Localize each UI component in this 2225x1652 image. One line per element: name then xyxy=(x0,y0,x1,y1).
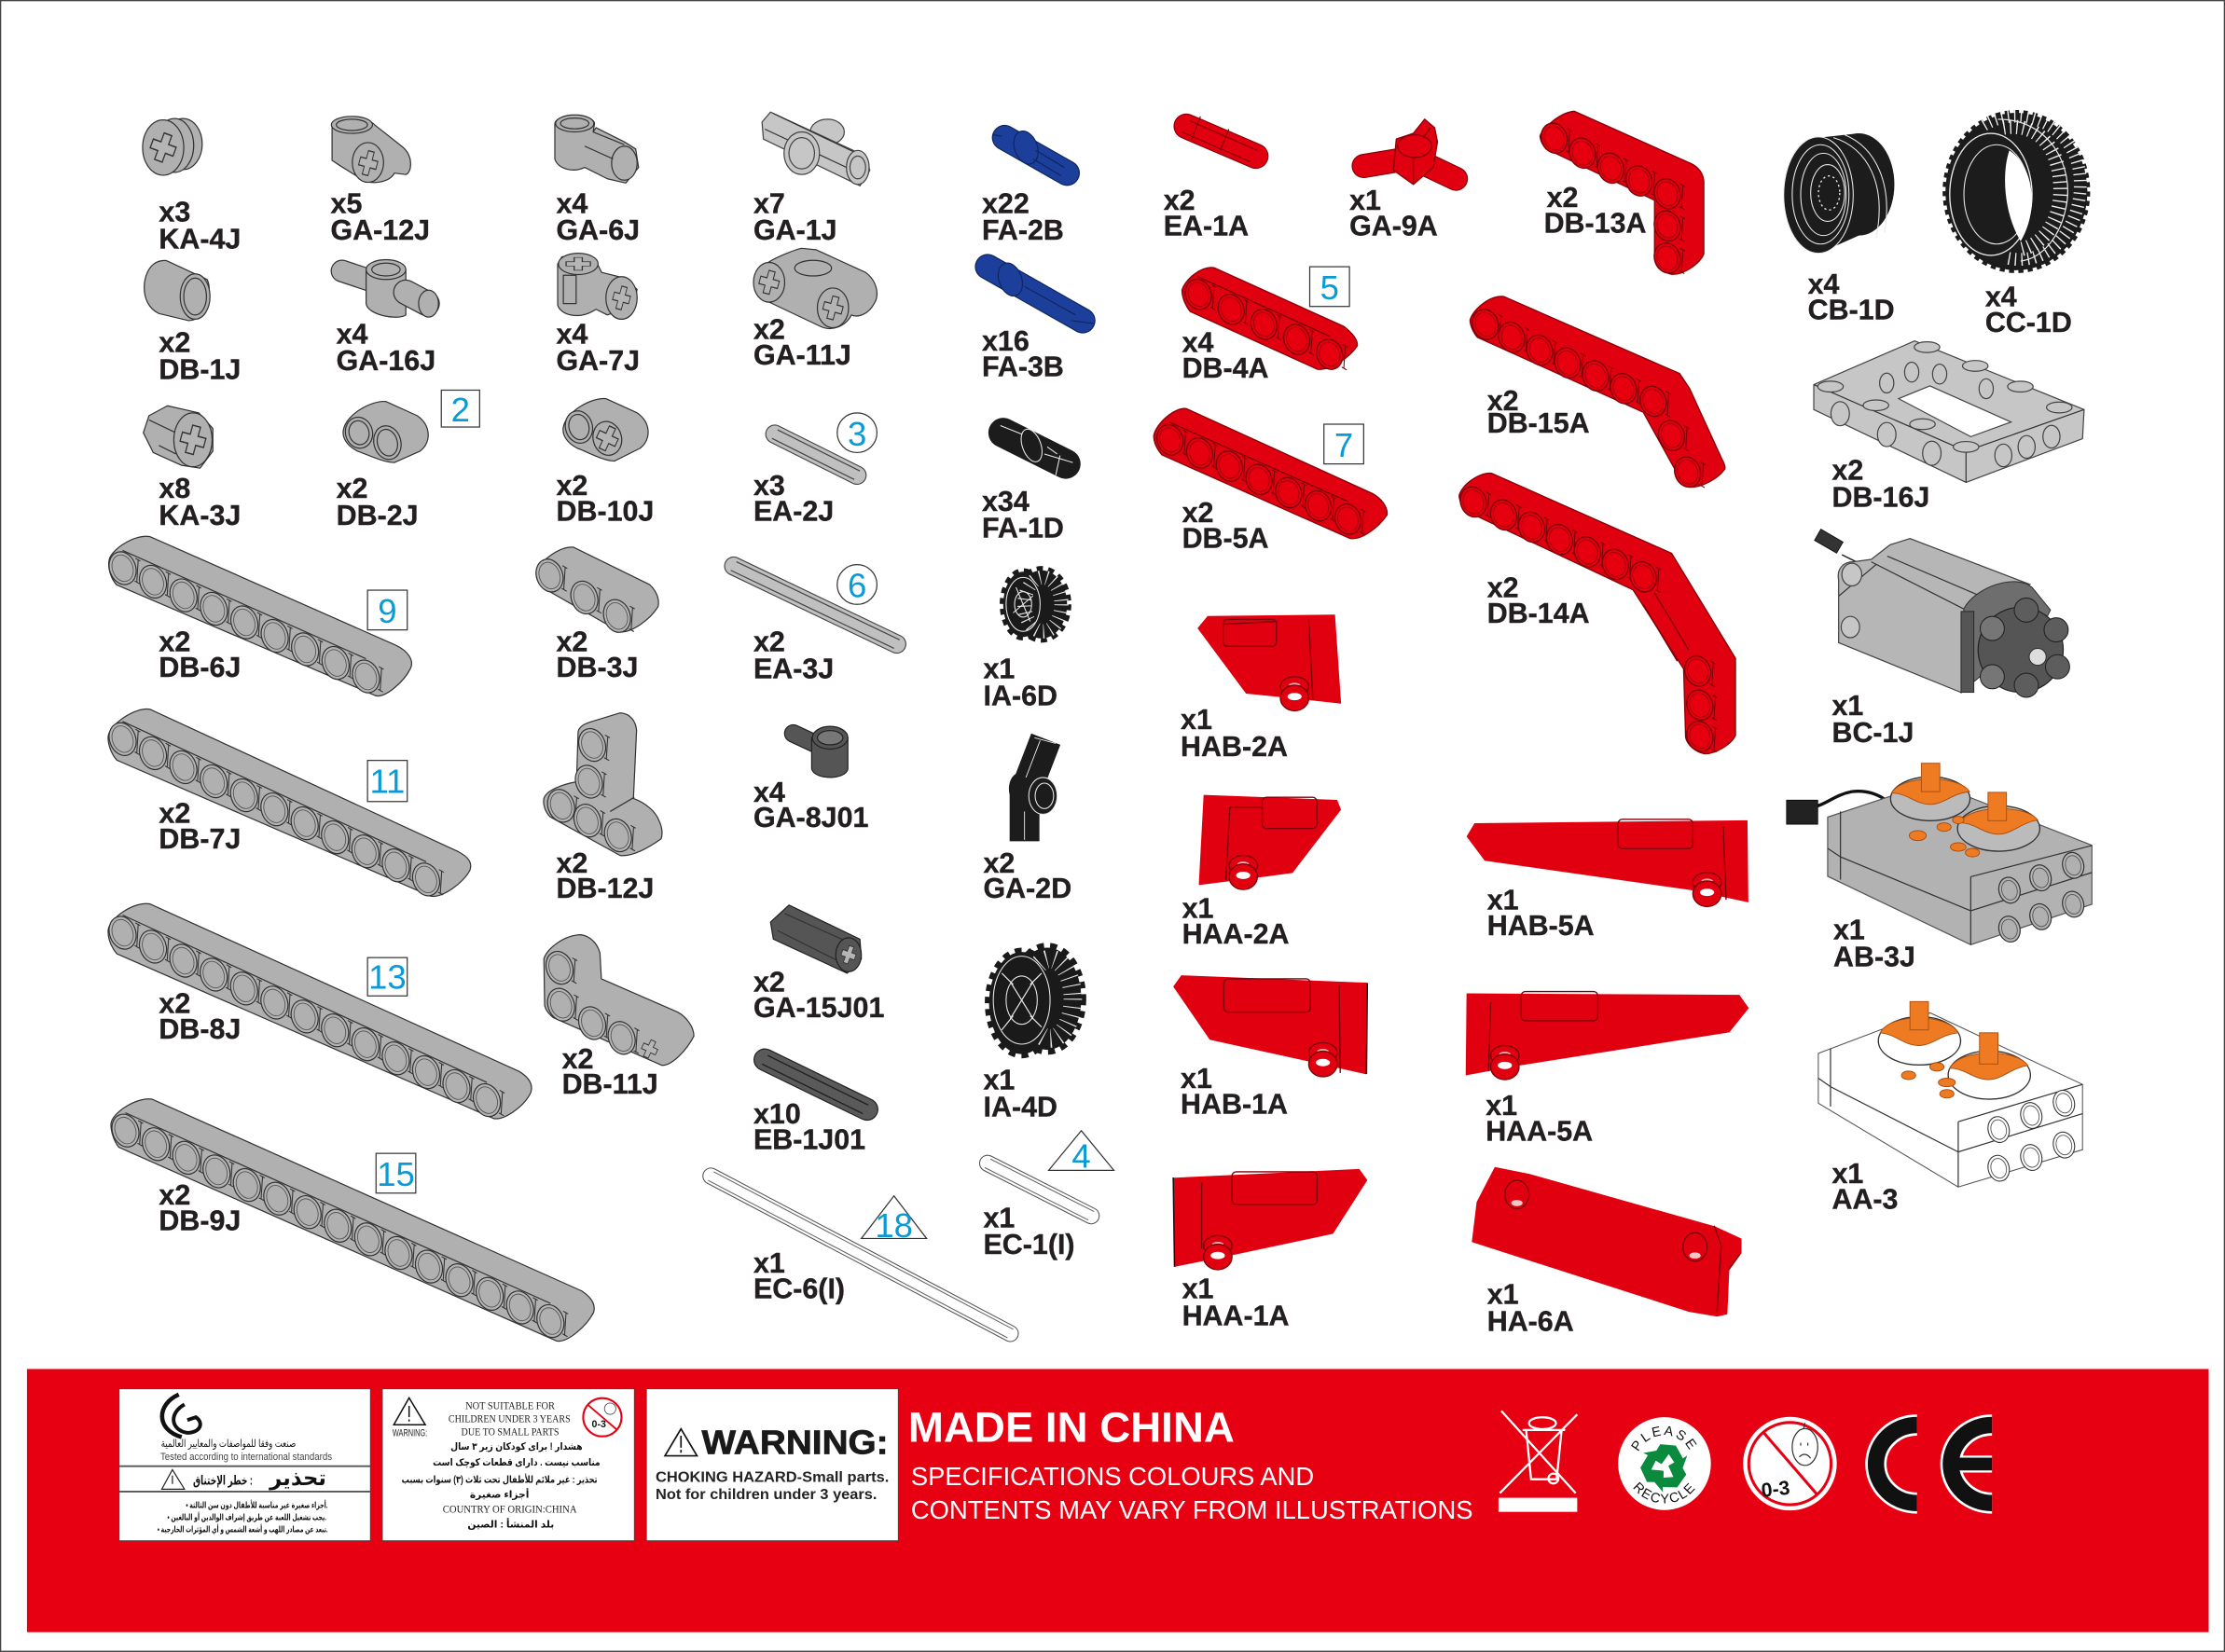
icon: GA-11J connector xyxy=(753,248,877,328)
icon: DB-15A red bent beam xyxy=(1468,296,1725,490)
icon: EC-1(I) axle xyxy=(985,1159,1094,1220)
label: CB-1D: CB-1D xyxy=(1808,294,1895,325)
icon: DB-5A red beam xyxy=(1153,408,1387,539)
badge: 2 xyxy=(441,390,479,429)
icon: GA-2D black connector xyxy=(1009,737,1057,841)
text: english warning: CHILDREN UNDER 3 YEARS xyxy=(449,1413,571,1425)
icon: FA-3B blue pin xyxy=(988,259,1094,324)
label: FA-2B: x22 xyxy=(982,187,1030,219)
part: FA-2B xyxy=(982,128,1067,246)
panel: certification label: Tested according to international standards xyxy=(160,1452,332,1463)
label: GA-16J: GA-16J xyxy=(337,345,435,377)
label: IA-6D: x1 xyxy=(984,653,1015,684)
panel: certification label xyxy=(119,1389,370,1541)
icon: please recycle: PLEASE xyxy=(1631,1426,1697,1451)
icon: CC-1D tyre xyxy=(1945,113,2087,270)
icon: CE mark xyxy=(1876,1425,1992,1503)
icon: please recycle: RECYCLE xyxy=(1633,1482,1695,1503)
part: HAB-2A xyxy=(1181,614,1341,763)
icon: HAB-1A red panel xyxy=(1173,975,1367,1077)
label: DB-11J: DB-11J xyxy=(562,1068,658,1100)
icon: DB-9J beam xyxy=(107,1099,594,1342)
icon: EB-1J01 axle xyxy=(762,1055,868,1114)
part: GA-2D xyxy=(984,737,1071,904)
text: english warning xyxy=(443,1400,577,1516)
icon: warning triangle small xyxy=(394,1397,425,1425)
badge: 15: 15 xyxy=(377,1155,415,1193)
label: HAB-1A: HAB-1A xyxy=(1181,1089,1288,1121)
panel: certification label: • أجزاء صغيرة غير مناسبة للأطفال دون سن الثالثة. xyxy=(186,1500,328,1511)
icon: DB-1J cylinder xyxy=(145,260,210,321)
part: DB-12J xyxy=(543,713,662,904)
icon: AB-3J battery box xyxy=(1787,764,2092,944)
icon: not for 0-3: 0-3 xyxy=(1760,1477,1791,1502)
icon: logo xyxy=(162,1395,200,1437)
text: specifications: SPECIFICATIONS COLOURS AND xyxy=(911,1462,1314,1491)
text: choking hazard: CHOKING HAZARD-Small parts. xyxy=(656,1469,889,1485)
label: DB-3J: DB-3J xyxy=(556,652,638,683)
icon: IA-4D gear xyxy=(989,948,1082,1054)
label: GA-9A: x1 xyxy=(1349,185,1381,216)
icon: EA-2J axle xyxy=(772,430,860,479)
label: EA-2J: EA-2J xyxy=(753,495,834,527)
part: IA-4D xyxy=(984,948,1082,1123)
label: DB-13A: DB-13A xyxy=(1544,208,1647,240)
label: DB-8J: x2 xyxy=(159,988,190,1020)
text: english warning: COUNTRY OF ORIGIN:CHINA xyxy=(443,1504,577,1516)
label: EA-3J: x2 xyxy=(753,626,785,657)
icon: DB-10J beam xyxy=(561,399,648,461)
badge: 3: 3 xyxy=(848,415,866,453)
badge: 5 xyxy=(1310,267,1349,307)
part: GA-11J xyxy=(753,248,877,371)
label: DB-9J: DB-9J xyxy=(159,1205,241,1236)
label: BC-1J: BC-1J xyxy=(1831,717,1914,749)
icon: HAA-5A red panel xyxy=(1466,992,1748,1080)
label: DB-10J: x2 xyxy=(556,470,587,502)
badge: 6: 6 xyxy=(848,567,866,605)
icon: DB-2J beam xyxy=(342,402,428,462)
label: IA-4D: x1 xyxy=(984,1065,1015,1096)
label: DB-10J: DB-10J xyxy=(556,495,654,527)
label: HAB-5A: x1 xyxy=(1487,884,1519,915)
label: DB-2J: x2 xyxy=(337,473,367,504)
part: DB-10J xyxy=(556,399,654,527)
label: DB-6J: x2 xyxy=(159,626,190,657)
icon: 0-3 small xyxy=(583,1398,621,1437)
icon: DB-6J beam xyxy=(104,536,411,696)
part: DB-6J xyxy=(104,536,411,696)
text: persian and arabic warning: هشدار ! برای کودکان زیر ۳ سال xyxy=(450,1441,583,1452)
badge: 3 xyxy=(837,413,877,453)
label: HAB-1A: x1 xyxy=(1181,1063,1212,1094)
label: IA-6D: IA-6D xyxy=(984,680,1057,711)
label: DB-12J: DB-12J xyxy=(556,873,654,904)
part: DB-9J xyxy=(107,1099,594,1342)
part: DB-3J xyxy=(532,547,658,683)
text: english warning: NOT SUITABLE FOR xyxy=(465,1400,555,1412)
icon: GA-7J connector xyxy=(558,254,637,319)
label: DB-1J: DB-1J xyxy=(159,353,241,385)
icon: GA-16J connector pin xyxy=(342,259,438,317)
part: HAB-5A xyxy=(1467,819,1748,942)
label: AB-3J: AB-3J xyxy=(1833,941,1915,972)
label: GA-1J: x7 xyxy=(753,187,785,219)
icon: DB-14A red bent beam xyxy=(1456,474,1735,755)
label: DB-14A: DB-14A xyxy=(1487,598,1590,629)
text: choking hazard: Not for children under 3 years. xyxy=(656,1487,877,1503)
icon: GA-8J01 connector xyxy=(794,726,848,778)
label: DB-11J: x2 xyxy=(562,1043,593,1075)
label: HAB-2A: x1 xyxy=(1181,704,1212,736)
part: CB-1D xyxy=(1784,133,1895,325)
badge: 7: 7 xyxy=(1334,426,1353,464)
label: GA-2D: x2 xyxy=(984,847,1015,879)
part: KA-4J xyxy=(143,118,241,255)
icon: DB-7J beam xyxy=(104,709,471,900)
panel: choking hazard warning xyxy=(646,1389,898,1541)
label: HAA-5A: x1 xyxy=(1486,1090,1517,1122)
text: persian and arabic warning: مناسب نیست . دارای قطعات کوچک است xyxy=(433,1457,601,1468)
icon: FA-2B blue pin xyxy=(993,128,1067,176)
label: DB-15A: x2 xyxy=(1487,385,1519,417)
part: CC-1D xyxy=(1945,113,2087,338)
label: DB-14A: x2 xyxy=(1487,572,1519,604)
label: DB-16J: DB-16J xyxy=(1831,481,1929,513)
label: FA-3B: FA-3B xyxy=(982,351,1064,382)
part: GA-1J xyxy=(753,112,870,246)
label: GA-7J: GA-7J xyxy=(556,345,640,377)
label: DB-2J: DB-2J xyxy=(337,500,419,531)
part: HAA-5A xyxy=(1466,992,1748,1147)
label: DB-12J: x2 xyxy=(556,847,587,879)
icon: CB-1D wheel rim xyxy=(1784,133,1894,254)
label: DB-16J: x2 xyxy=(1831,454,1863,486)
icon: warning triangle xyxy=(665,1429,697,1456)
label: FA-1D: FA-1D xyxy=(982,513,1064,544)
badge: 18 xyxy=(862,1196,927,1245)
icon: GA-9A red connector xyxy=(1363,119,1456,185)
panel: certification label: • تبعد عن مصادر اللهب و أشعة الشمس و أي المؤثرات الخارجية. xyxy=(158,1523,328,1535)
part: GA-9A xyxy=(1349,119,1456,242)
heading: made in china: MADE IN CHINA xyxy=(908,1404,1235,1452)
badge: 9: 9 xyxy=(378,592,397,630)
part: EB-1J01 xyxy=(753,1055,868,1156)
text: arabic warning: تحذير xyxy=(269,1466,326,1491)
panel: certification label: • يجب تشغيل اللعبة عن طريق إشراف الوالدين أو البالغين. xyxy=(168,1512,326,1523)
badge: 5: 5 xyxy=(1320,268,1339,307)
label: DB-9J: x2 xyxy=(159,1179,190,1211)
part: EC-1(I) xyxy=(984,1159,1094,1260)
label: AA-3: AA-3 xyxy=(1831,1183,1898,1215)
part: DB-7J xyxy=(104,709,471,900)
label: DB-8J: DB-8J xyxy=(159,1013,241,1045)
icon: HA-6A red panel xyxy=(1472,1167,1742,1316)
icon: EA-1A red axle xyxy=(1182,117,1257,161)
part: BC-1J xyxy=(1815,530,2069,749)
icon: KA-4J bush xyxy=(143,118,202,175)
badge: 13: 13 xyxy=(368,958,407,997)
label: HA-6A: x1 xyxy=(1487,1278,1519,1310)
icon: HAB-5A red panel xyxy=(1467,819,1748,906)
label: HAA-2A: x1 xyxy=(1182,893,1213,925)
label: EA-1A: x2 xyxy=(1164,185,1195,216)
part: EA-3J xyxy=(731,562,900,684)
part: FA-1D xyxy=(982,426,1072,544)
part: DB-2J xyxy=(337,402,428,531)
text: persian and arabic warning: تحذير : غير ملائم للأطفال تحت ثلاث (٣) سنوات بسبب xyxy=(402,1474,598,1486)
panel: multilingual age warning label xyxy=(382,1389,634,1541)
part: HAA-1A xyxy=(1173,1169,1367,1331)
label: DB-7J: x2 xyxy=(159,798,190,830)
icon: BC-1J motor xyxy=(1815,530,2069,697)
icon: HAA-1A red panel xyxy=(1173,1169,1367,1270)
text: specifications: CONTENTS MAY VARY FROM ILLUSTRATIONS xyxy=(911,1495,1473,1524)
badge: 7 xyxy=(1324,424,1363,464)
text: persian and arabic warning xyxy=(402,1441,601,1530)
icon: GA-15J01 hex tube xyxy=(770,905,862,973)
label: DB-5A: x2 xyxy=(1182,497,1213,529)
label: EA-2J: x3 xyxy=(753,470,785,502)
part: DB-4A xyxy=(1182,268,1358,384)
part: GA-15J01 xyxy=(753,905,884,1024)
label: GA-15J01: x2 xyxy=(753,967,785,998)
label: EC-1(I): x1 xyxy=(984,1202,1015,1233)
text: english warning: DUE TO SMALL PARTS xyxy=(462,1425,560,1438)
part: GA-8J01 xyxy=(753,726,869,833)
label: EC-6(I): x1 xyxy=(753,1247,785,1279)
part: DB-11J xyxy=(542,935,694,1100)
part: GA-7J xyxy=(556,254,640,377)
badge: 18: 18 xyxy=(875,1206,913,1245)
icon: crossed-out bin xyxy=(1499,1411,1577,1512)
panel: red footer banner xyxy=(26,1369,2208,1632)
label: BC-1J: x1 xyxy=(1831,690,1863,722)
label: DB-4A: x4 xyxy=(1182,326,1213,358)
part: AA-3 xyxy=(1818,1001,2082,1215)
label: GA-12J: x5 xyxy=(331,187,362,219)
icon: DB-4A red beam xyxy=(1182,268,1358,373)
icon: not for 0-3 xyxy=(1743,1417,1837,1510)
label: HA-6A: HA-6A xyxy=(1487,1305,1574,1337)
part: DB-8J xyxy=(104,903,532,1121)
icon: GA-1J connector xyxy=(762,112,870,186)
icon: DB-13A red L-beam xyxy=(1537,111,1704,277)
label: DB-3J: x2 xyxy=(556,626,587,657)
label: CC-1D: CC-1D xyxy=(1985,307,2072,338)
label: HAA-1A: HAA-1A xyxy=(1182,1300,1290,1331)
label: EB-1J01: x10 xyxy=(753,1098,801,1130)
part: HAB-1A xyxy=(1173,975,1367,1121)
icon: DB-11J L-beam xyxy=(542,935,694,1066)
label: EC-1(I): EC-1(I) xyxy=(984,1229,1075,1260)
part: AB-3J xyxy=(1787,764,2092,972)
label: GA-6J: x4 xyxy=(556,187,587,219)
icon: HAA-2A red panel xyxy=(1199,795,1341,889)
part: HAA-2A xyxy=(1182,795,1341,950)
label: EA-1A: EA-1A xyxy=(1164,211,1249,242)
icon: please recycle xyxy=(1618,1417,1711,1510)
label: KA-3J: KA-3J xyxy=(159,500,241,531)
part: EA-2J xyxy=(753,430,860,527)
label: KA-4J: x3 xyxy=(159,196,190,227)
icon: IA-6D gear xyxy=(1003,571,1067,639)
part: DB-13A xyxy=(1537,111,1704,277)
label: GA-7J: x4 xyxy=(556,318,587,350)
text: persian and arabic warning: أجزاء صغيرة xyxy=(470,1488,529,1501)
label: DB-5A: DB-5A xyxy=(1182,522,1269,554)
label: GA-11J: x2 xyxy=(753,314,785,346)
part: DB-16J xyxy=(1814,341,2084,513)
label: AB-3J: x1 xyxy=(1833,914,1865,945)
badge: 2: 2 xyxy=(451,391,470,429)
part: KA-3J xyxy=(144,406,241,531)
label: GA-9A: GA-9A xyxy=(1349,211,1438,242)
part: DB-1J xyxy=(145,260,241,385)
icon: FA-1D black pin xyxy=(1001,426,1072,475)
label: GA-15J01: GA-15J01 xyxy=(753,992,884,1024)
label: DB-15A: DB-15A xyxy=(1487,407,1590,439)
icon: GA-12J connector xyxy=(331,117,410,183)
icon: GA-6J connector xyxy=(555,115,639,183)
badge: 4 xyxy=(1049,1131,1114,1175)
part: EC-6(I) xyxy=(708,1172,1013,1338)
part: EA-1A xyxy=(1164,117,1257,242)
label: FA-1D: x34 xyxy=(982,486,1030,517)
label: DB-4A: DB-4A xyxy=(1182,352,1269,384)
label: HAA-5A: HAA-5A xyxy=(1486,1115,1593,1147)
label: GA-8J01: GA-8J01 xyxy=(753,802,869,833)
panel: certification label: خطر الإختناق : xyxy=(193,1473,253,1488)
label: EA-3J: EA-3J xyxy=(753,653,834,684)
label: GA-1J: GA-1J xyxy=(753,214,837,246)
label: FA-3B: x16 xyxy=(982,325,1030,357)
label: FA-2B: FA-2B xyxy=(982,214,1064,246)
label: GA-11J: GA-11J xyxy=(753,339,851,371)
part: GA-12J xyxy=(331,117,430,246)
label: GA-6J: GA-6J xyxy=(556,214,640,246)
label: EB-1J01: EB-1J01 xyxy=(753,1124,865,1156)
text: tested: صنعت وفقا للمواصفات والمعايير العالمية xyxy=(161,1439,296,1451)
label: DB-13A: x2 xyxy=(1547,182,1578,213)
icon: 0-3 small: 0-3 xyxy=(592,1419,606,1430)
label: KA-3J: x8 xyxy=(159,473,190,504)
label: AA-3: x1 xyxy=(1831,1158,1863,1190)
part: IA-6D xyxy=(984,571,1067,711)
label: DB-7J: DB-7J xyxy=(159,823,241,855)
label: DB-1J: x2 xyxy=(159,326,190,358)
icon: HAB-2A red panel xyxy=(1197,614,1341,710)
icon: warning triangle xyxy=(161,1469,185,1489)
text: warning word: WARNING: xyxy=(393,1428,427,1439)
badge: 9 xyxy=(367,590,408,630)
badge: 11: 11 xyxy=(369,763,405,801)
label: IA-4D: IA-4D xyxy=(984,1092,1057,1123)
part: GA-6J xyxy=(555,115,640,246)
label: HAA-1A: x1 xyxy=(1182,1273,1213,1304)
icon: EC-6(I) axle xyxy=(708,1172,1013,1338)
icon: DB-3J beam xyxy=(532,547,658,636)
icon: AA-3 battery box xyxy=(1818,1001,2082,1187)
label: GA-2D: GA-2D xyxy=(984,873,1071,904)
icon: DB-12J T-beam xyxy=(543,713,662,856)
part: DB-14A xyxy=(1456,474,1735,755)
part: HA-6A xyxy=(1472,1167,1742,1337)
part: DB-15A xyxy=(1468,296,1725,490)
part: GA-16J xyxy=(337,259,438,377)
part: DB-5A xyxy=(1153,408,1387,554)
label: CC-1D: x4 xyxy=(1985,282,2017,313)
label: CB-1D: x4 xyxy=(1808,268,1840,300)
badge: 6 xyxy=(837,565,877,605)
label: DB-6J: DB-6J xyxy=(159,652,241,683)
label: GA-16J: x4 xyxy=(337,318,368,350)
label: HAB-5A: HAB-5A xyxy=(1487,910,1595,942)
label: GA-8J01: x4 xyxy=(753,777,785,808)
label: GA-12J: GA-12J xyxy=(331,214,430,246)
label: HAA-2A: HAA-2A xyxy=(1182,918,1290,950)
icon: EA-3J axle xyxy=(731,562,900,648)
text: warning heading: WARNING: xyxy=(701,1423,889,1461)
label: HAB-2A: HAB-2A xyxy=(1181,731,1288,763)
icon: DB-16J frame xyxy=(1814,341,2084,482)
icon: DB-8J beam xyxy=(104,903,532,1121)
text: persian and arabic warning: بلد المنشأ : الصين xyxy=(467,1517,554,1530)
label: EC-6(I): EC-6(I) xyxy=(753,1273,845,1304)
part: FA-3B xyxy=(982,259,1094,382)
badge: 4: 4 xyxy=(1071,1136,1091,1175)
icon: KA-3J bush xyxy=(144,406,213,468)
label: KA-4J: KA-4J xyxy=(159,223,241,255)
